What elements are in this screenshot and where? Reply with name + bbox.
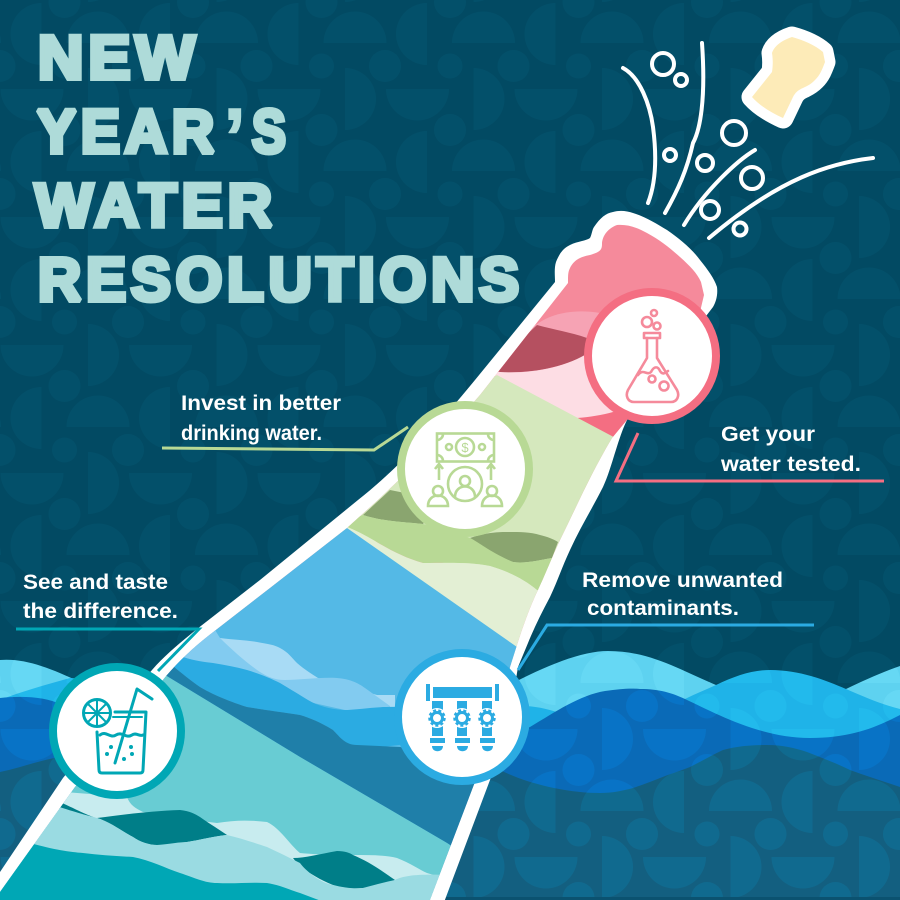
wave: medium light blue [182,630,390,710]
champagne spray lines and bubbles [623,43,873,238]
icon badge: drink glass [53,667,181,795]
label: taste [23,571,178,623]
bottom edge strip [430,897,900,900]
dollar sign: $ [461,440,469,455]
spray line 2 [665,43,703,213]
band: dark red wave [498,325,586,372]
band: pale green [331,527,538,663]
label: remove [582,569,783,620]
cork fill [752,37,825,118]
wave: steel blue [166,667,474,846]
band: sky blue [0,528,540,900]
wave: teal bottom [0,843,330,900]
wave: pale blue [220,638,395,707]
wave: mid green [345,515,560,590]
label: tested: Get your [721,423,815,446]
wave: dark green right [470,532,558,563]
bottle colour bands [0,224,704,900]
label: taste: See and taste [23,571,168,594]
bottle white outline [0,211,717,900]
band: aqua [0,675,470,900]
wave: pale aqua [34,792,439,900]
title line 4: RESOLUTIONS [38,246,524,314]
band: light pink [492,312,599,380]
leader line: tested [616,433,884,481]
spray line 1 [623,68,655,203]
wave: lower water [0,745,900,900]
icon badge: flask [588,292,716,420]
wave: light teal [34,807,440,900]
wave: deep blue [0,689,900,800]
cork outline [752,37,825,118]
spray line 4 [709,158,873,238]
wave: bright blue [0,670,900,800]
title line 2: S [252,98,290,166]
cork [752,37,825,118]
wave: dark teal left [59,804,227,845]
band: light green [347,375,613,592]
bottle [0,210,718,900]
wave: dark green left [363,490,424,524]
label: invest [181,392,341,445]
title line 1: NEW [38,24,200,92]
title line 2: ’ [223,91,251,185]
label: invest: drinking water. [181,422,322,445]
title [35,24,524,314]
wave: light cyan [0,651,900,760]
title line 2: YEAR [37,98,219,166]
label: remove: contaminants. [587,597,739,620]
label: tested [720,423,861,476]
label: invest: Invest in better [181,392,341,415]
water waves background [0,651,900,900]
leader line: remove [518,625,814,670]
label: tested: water tested. [720,453,861,476]
band: salmon [578,412,628,437]
label: taste: the difference. [23,600,178,623]
leader line: taste [16,629,199,671]
band: pale pink [495,356,628,436]
wave: blue [174,657,400,746]
icon badge: filtration system [398,653,526,781]
wave: dark teal right [293,851,395,888]
label: remove: Remove unwanted [582,569,783,592]
spray line 3 [684,150,755,225]
leader line: invest [162,427,408,450]
bubbles [652,53,763,236]
title line 3: WATER [35,172,277,240]
icon badge: money and people [401,405,529,533]
